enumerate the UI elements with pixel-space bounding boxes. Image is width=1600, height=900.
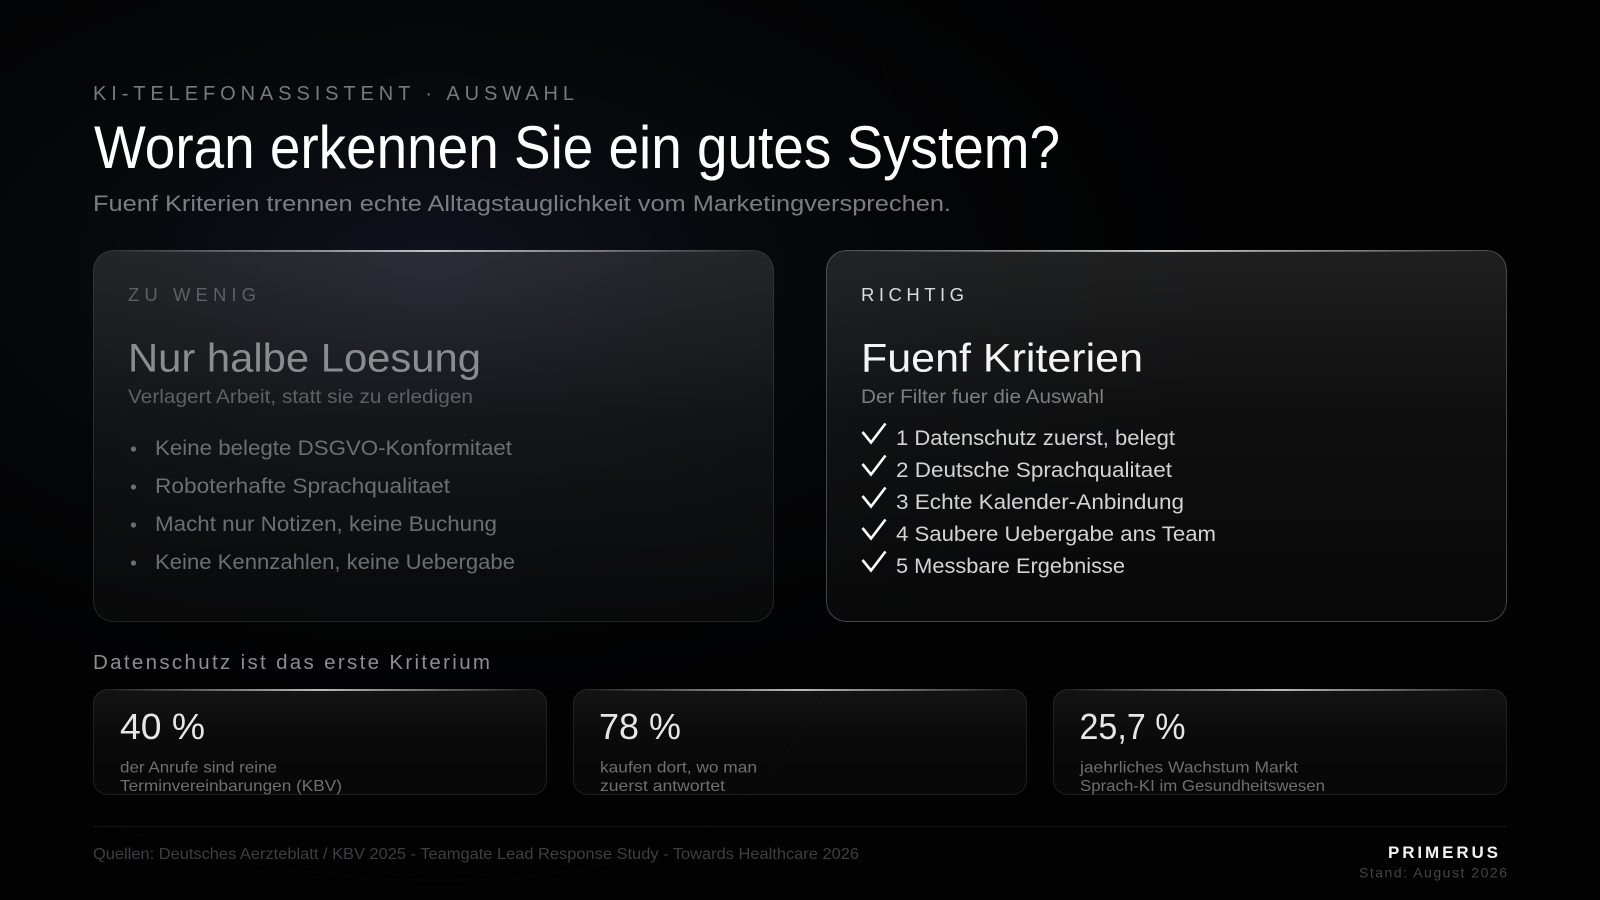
stat label: kaufen dort, wo man: [600, 760, 757, 776]
brand: PRIMERUS: [1388, 843, 1498, 862]
checklist: 2 Deutsche Sprachqualitaet: [896, 459, 1172, 482]
stat label: Terminvereinbarungen (KBV): [120, 778, 342, 795]
bullet list: Keine belegte DSGVO-Konformitaet: [155, 437, 512, 460]
checklist: 5 Messbare Ergebnisse: [896, 555, 1125, 578]
stat label: [600, 760, 757, 795]
bullet list: [131, 437, 515, 574]
stat label: zuerst antwortet: [600, 778, 726, 795]
header: [93, 83, 1060, 216]
stat label: jaehrliches Wachstum Markt: [1079, 760, 1299, 776]
stat value: 40 %: [120, 706, 205, 747]
checklist: 3 Echte Kalender-Anbindung: [896, 491, 1184, 514]
panel label: RICHTIG: [861, 284, 964, 305]
icon: check: [862, 552, 886, 570]
panel label: ZU WENIG: [128, 284, 256, 305]
stat label: [1079, 760, 1325, 795]
title: Woran erkennen Sie ein gutes System?: [94, 114, 1060, 181]
stat label: [120, 760, 342, 795]
panel: zu wenig: [94, 250, 774, 622]
subtitle: Fuenf Kriterien trennen echte Alltagstauglichkeit vom Marketingversprechen.: [93, 191, 951, 216]
stat card: 78 %: [574, 689, 1026, 795]
checklist: 1 Datenschutz zuerst, belegt: [896, 427, 1175, 450]
panel subheading: Der Filter fuer die Auswahl: [861, 386, 1104, 408]
icon: check: [862, 456, 886, 474]
bullet list: Macht nur Notizen, keine Buchung: [155, 513, 497, 536]
stat card: 40 %: [94, 689, 546, 795]
panel: richtig: [826, 250, 1506, 622]
stat value: 25,7 %: [1080, 706, 1186, 747]
sources: Quellen: Deutsches Aerzteblatt / KBV 2025 - Teamgate Lead Response Study - Towards Healthcare 2026: [93, 846, 859, 863]
footer: [93, 826, 1507, 880]
stat value: 78 %: [599, 706, 681, 747]
date: Stand: August 2026: [1359, 864, 1507, 880]
panel heading: Nur halbe Loesung: [128, 336, 481, 380]
panel subheading: Verlagert Arbeit, statt sie zu erledigen: [128, 386, 473, 408]
icon: check: [862, 424, 886, 442]
checklist: 4 Saubere Uebergabe ans Team: [896, 523, 1216, 546]
stat label: Sprach-KI im Gesundheitswesen: [1080, 778, 1325, 795]
panel heading: Fuenf Kriterien: [861, 336, 1143, 380]
eyebrow: KI-TELEFONASSISTENT · AUSWAHL: [93, 83, 574, 105]
checklist: [862, 424, 1216, 578]
bullet list: Keine Kennzahlen, keine Uebergabe: [155, 551, 515, 574]
icon: check: [862, 520, 886, 538]
section heading: Datenschutz ist das erste Kriterium: [93, 651, 490, 674]
bullet list: Roboterhafte Sprachqualitaet: [155, 475, 450, 498]
stat label: der Anrufe sind reine: [120, 760, 277, 776]
icon: check: [862, 488, 886, 506]
stat card: 25,7 %: [1054, 689, 1506, 795]
